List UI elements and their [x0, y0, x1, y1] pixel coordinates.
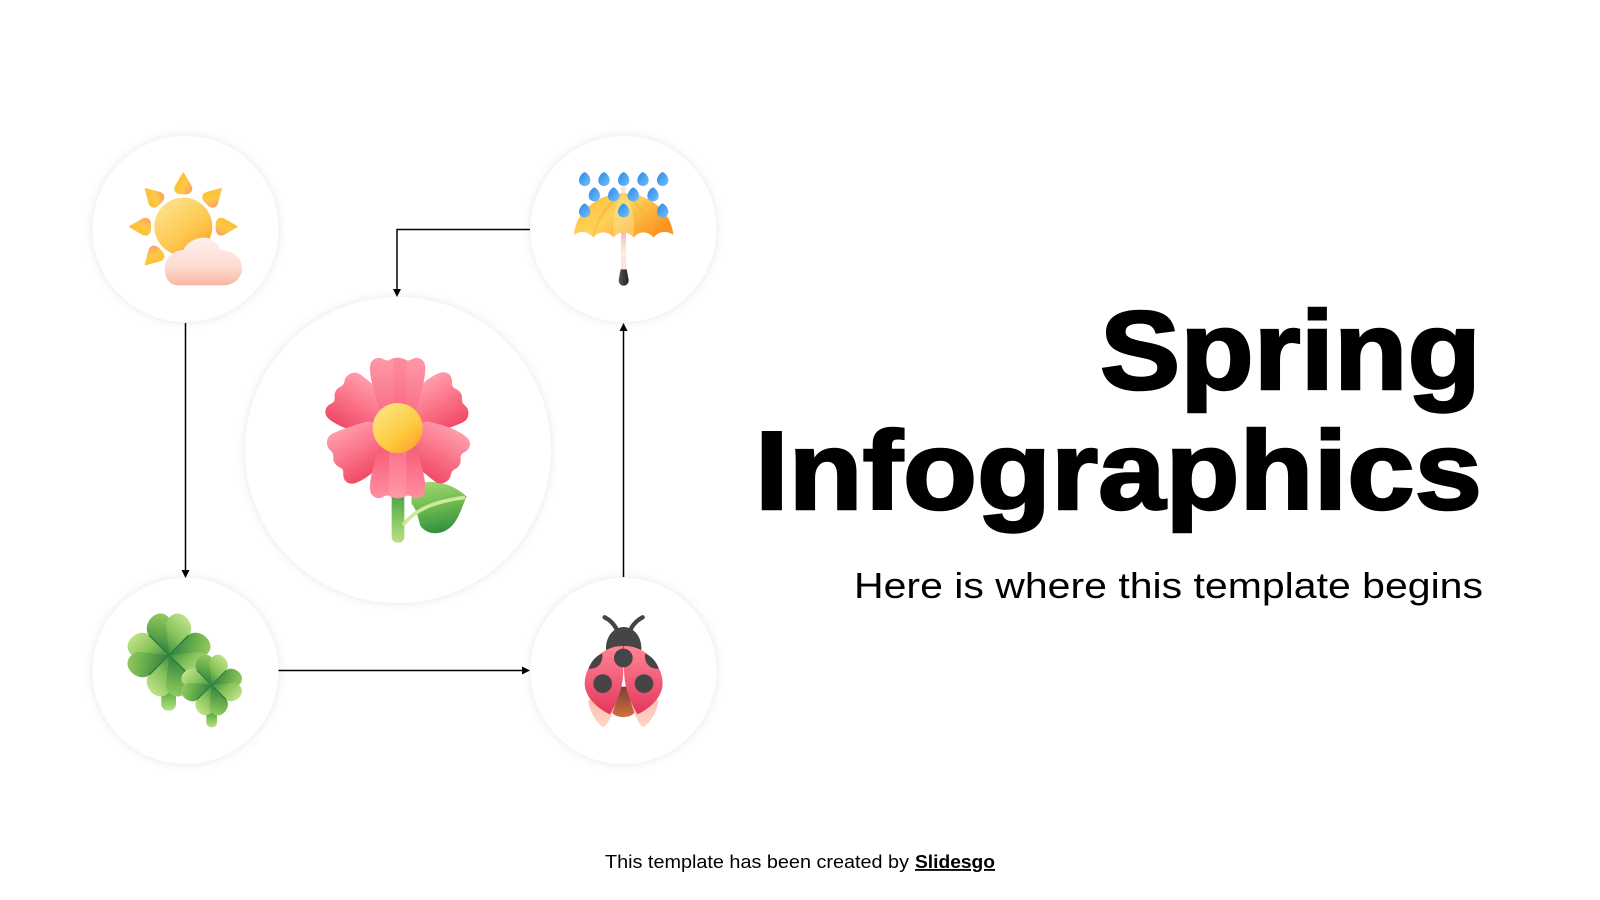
circle: sun and cloud: [92, 136, 278, 322]
icon: umbrella in the rain: [574, 172, 673, 286]
subtitle: Here is where this template begins: [854, 565, 1483, 606]
circle: ladybug: [530, 578, 716, 764]
arrow: sun to clovers: [182, 323, 190, 578]
footer credit: This template has been created by: [605, 851, 910, 872]
title: Infographics: [755, 409, 1482, 533]
arrow: umbrella to flower: [393, 230, 530, 297]
circle: clovers: [92, 578, 278, 764]
title: Spring: [1100, 289, 1481, 413]
panel: weather diagram: [92, 136, 716, 764]
arrow: ladybug to umbrella: [620, 323, 628, 577]
icon: pink flower: [321, 358, 474, 543]
arrow: clovers to ladybug: [278, 666, 530, 674]
icon: ladybug: [585, 617, 663, 727]
title: [755, 289, 1482, 533]
icon: two four-leaf clovers: [123, 609, 245, 727]
circle: umbrella and rain: [530, 136, 716, 322]
circle: flower: [245, 297, 551, 603]
footer credit: Slidesgo: [915, 851, 995, 872]
icon: sun behind cloud: [129, 172, 242, 285]
